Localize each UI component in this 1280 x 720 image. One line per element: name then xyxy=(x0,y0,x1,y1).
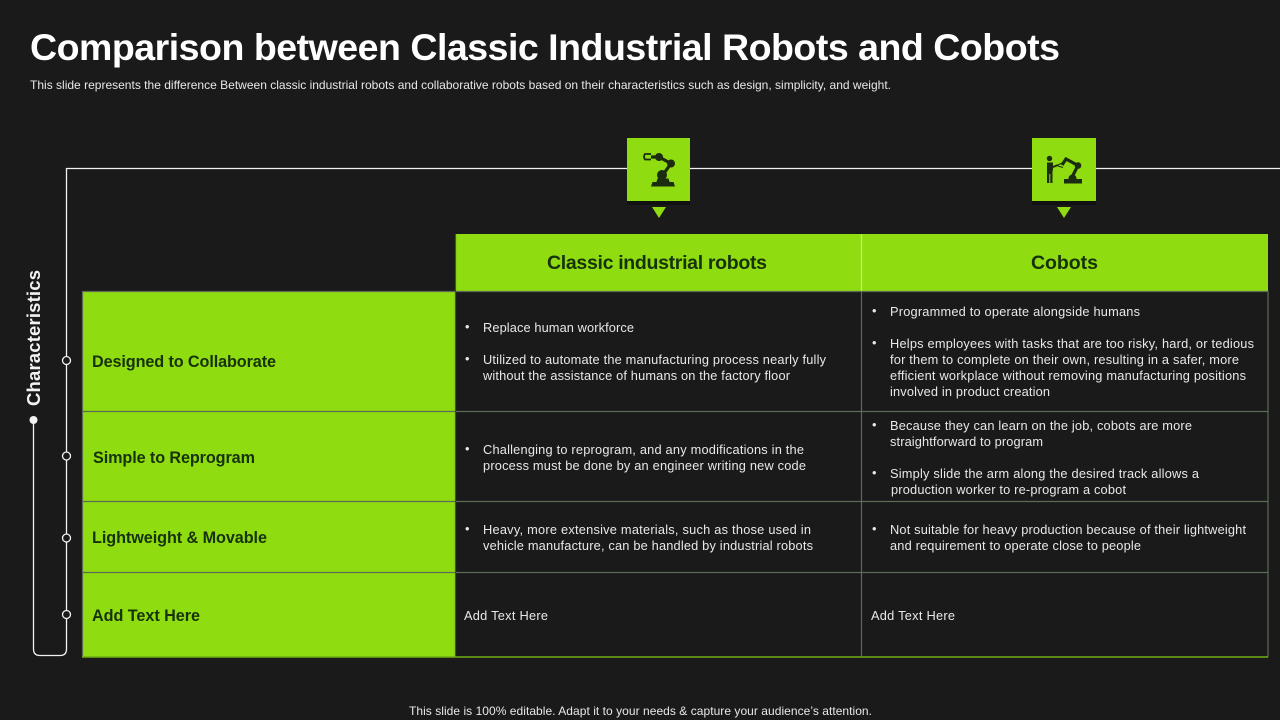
cell: row 2 classic: • xyxy=(465,441,469,456)
row label: Simple to Reprogram: Simple to Reprogram xyxy=(93,449,255,467)
cell: row 1 cobots: • xyxy=(872,303,876,318)
cell: row 2 classic: process must be done by an engineer writing new code xyxy=(483,458,806,473)
cell: row 2 cobots: straightforward to program xyxy=(890,434,1043,449)
cell: row 1 classic: without the assistance of humans on the factory floor xyxy=(482,368,791,383)
cell: row 1 cobots: for them to complete on their own, resulting in a safer, more xyxy=(890,352,1239,367)
cell: row 1 cobots: efficient workplace without removing manufacturing positions xyxy=(890,368,1246,383)
cell: row 2 cobots: Because they can learn on the job, cobots are more xyxy=(890,418,1192,433)
column header: Classic industrial robots xyxy=(455,234,861,291)
cell: row 3 cobots xyxy=(872,521,1246,553)
cell: row 1 classic xyxy=(465,319,827,383)
cell: row 1 cobots: involved in product creation xyxy=(890,384,1050,399)
cell: row 3 cobots: and requirement to operate close to people xyxy=(890,538,1141,553)
cell: row 3 cobots: Not suitable for heavy production because of their lightweight xyxy=(890,522,1246,537)
title: Comparison between Classic Industrial Robots and Cobots xyxy=(30,26,1060,68)
cell: row 3 classic: vehicle manufacture, can be handled by industrial robots xyxy=(483,538,813,553)
cell: row 1 classic: • xyxy=(465,351,469,366)
cell: row 2 cobots xyxy=(872,417,1200,497)
cell: row 2 cobots: Simply slide the arm along the desired track allows a xyxy=(890,466,1200,481)
cell: row 1 classic: • xyxy=(465,319,469,334)
cell: row 2 cobots: • xyxy=(872,417,876,432)
row marker dots xyxy=(62,356,70,618)
cell: row 2 cobots: • xyxy=(872,465,876,480)
side label: Characteristics: Characteristics xyxy=(23,270,44,406)
column header: Cobots xyxy=(861,234,1268,291)
subtitle: This slide represents the difference Between classic industrial robots and collaborative robots based on their characteristics such as design, simplicity, and weight. xyxy=(30,78,891,92)
cell: row 3 classic: • xyxy=(465,521,469,536)
cell: row 1 classic: Replace human workforce xyxy=(483,320,634,335)
cell: row 2 classic xyxy=(465,441,806,473)
grid lines xyxy=(82,234,1268,657)
cell: row 3 classic: Heavy, more extensive materials, such as those used in xyxy=(483,522,811,537)
table xyxy=(82,234,1268,657)
column header: Classic industrial robots: Classic industrial robots xyxy=(547,252,767,274)
bracket connector line xyxy=(34,168,1280,656)
cell: row 1 cobots: Helps employees with tasks that are too risky, hard, or tedious xyxy=(890,336,1254,351)
cell: row 1 cobots: Programmed to operate alongside humans xyxy=(890,304,1140,319)
cell: row 4 cobots: Add Text Here xyxy=(871,608,955,623)
cell: row 4 classic: Add Text Here xyxy=(464,608,548,623)
footer note: This slide is 100% editable. Adapt it to your needs & capture your audience’s attention. xyxy=(409,704,872,718)
cell: row 1 cobots: • xyxy=(872,335,876,350)
cell: row 1 classic: Utilized to automate the manufacturing process nearly fully xyxy=(483,352,827,367)
cell: row 2 classic: Challenging to reprogram, and any modifications in the xyxy=(483,442,804,457)
row header column xyxy=(82,291,455,657)
row label: Designed to Collaborate: Designed to Collaborate xyxy=(92,353,276,371)
row label: Lightweight and Movable: Lightweight & Movable xyxy=(92,529,267,547)
cell: row 2 cobots: production worker to re-program a cobot xyxy=(891,482,1126,497)
cell: row 3 cobots: • xyxy=(872,521,876,536)
cell: row 3 classic xyxy=(465,521,813,553)
column header: Cobots: Cobots xyxy=(1031,252,1098,274)
cell: row 1 cobots xyxy=(872,303,1254,399)
row label: Add Text Here: Add Text Here xyxy=(92,607,200,625)
icon: classic industrial robot arm xyxy=(627,138,690,218)
icon: cobot with worker xyxy=(1032,138,1096,218)
